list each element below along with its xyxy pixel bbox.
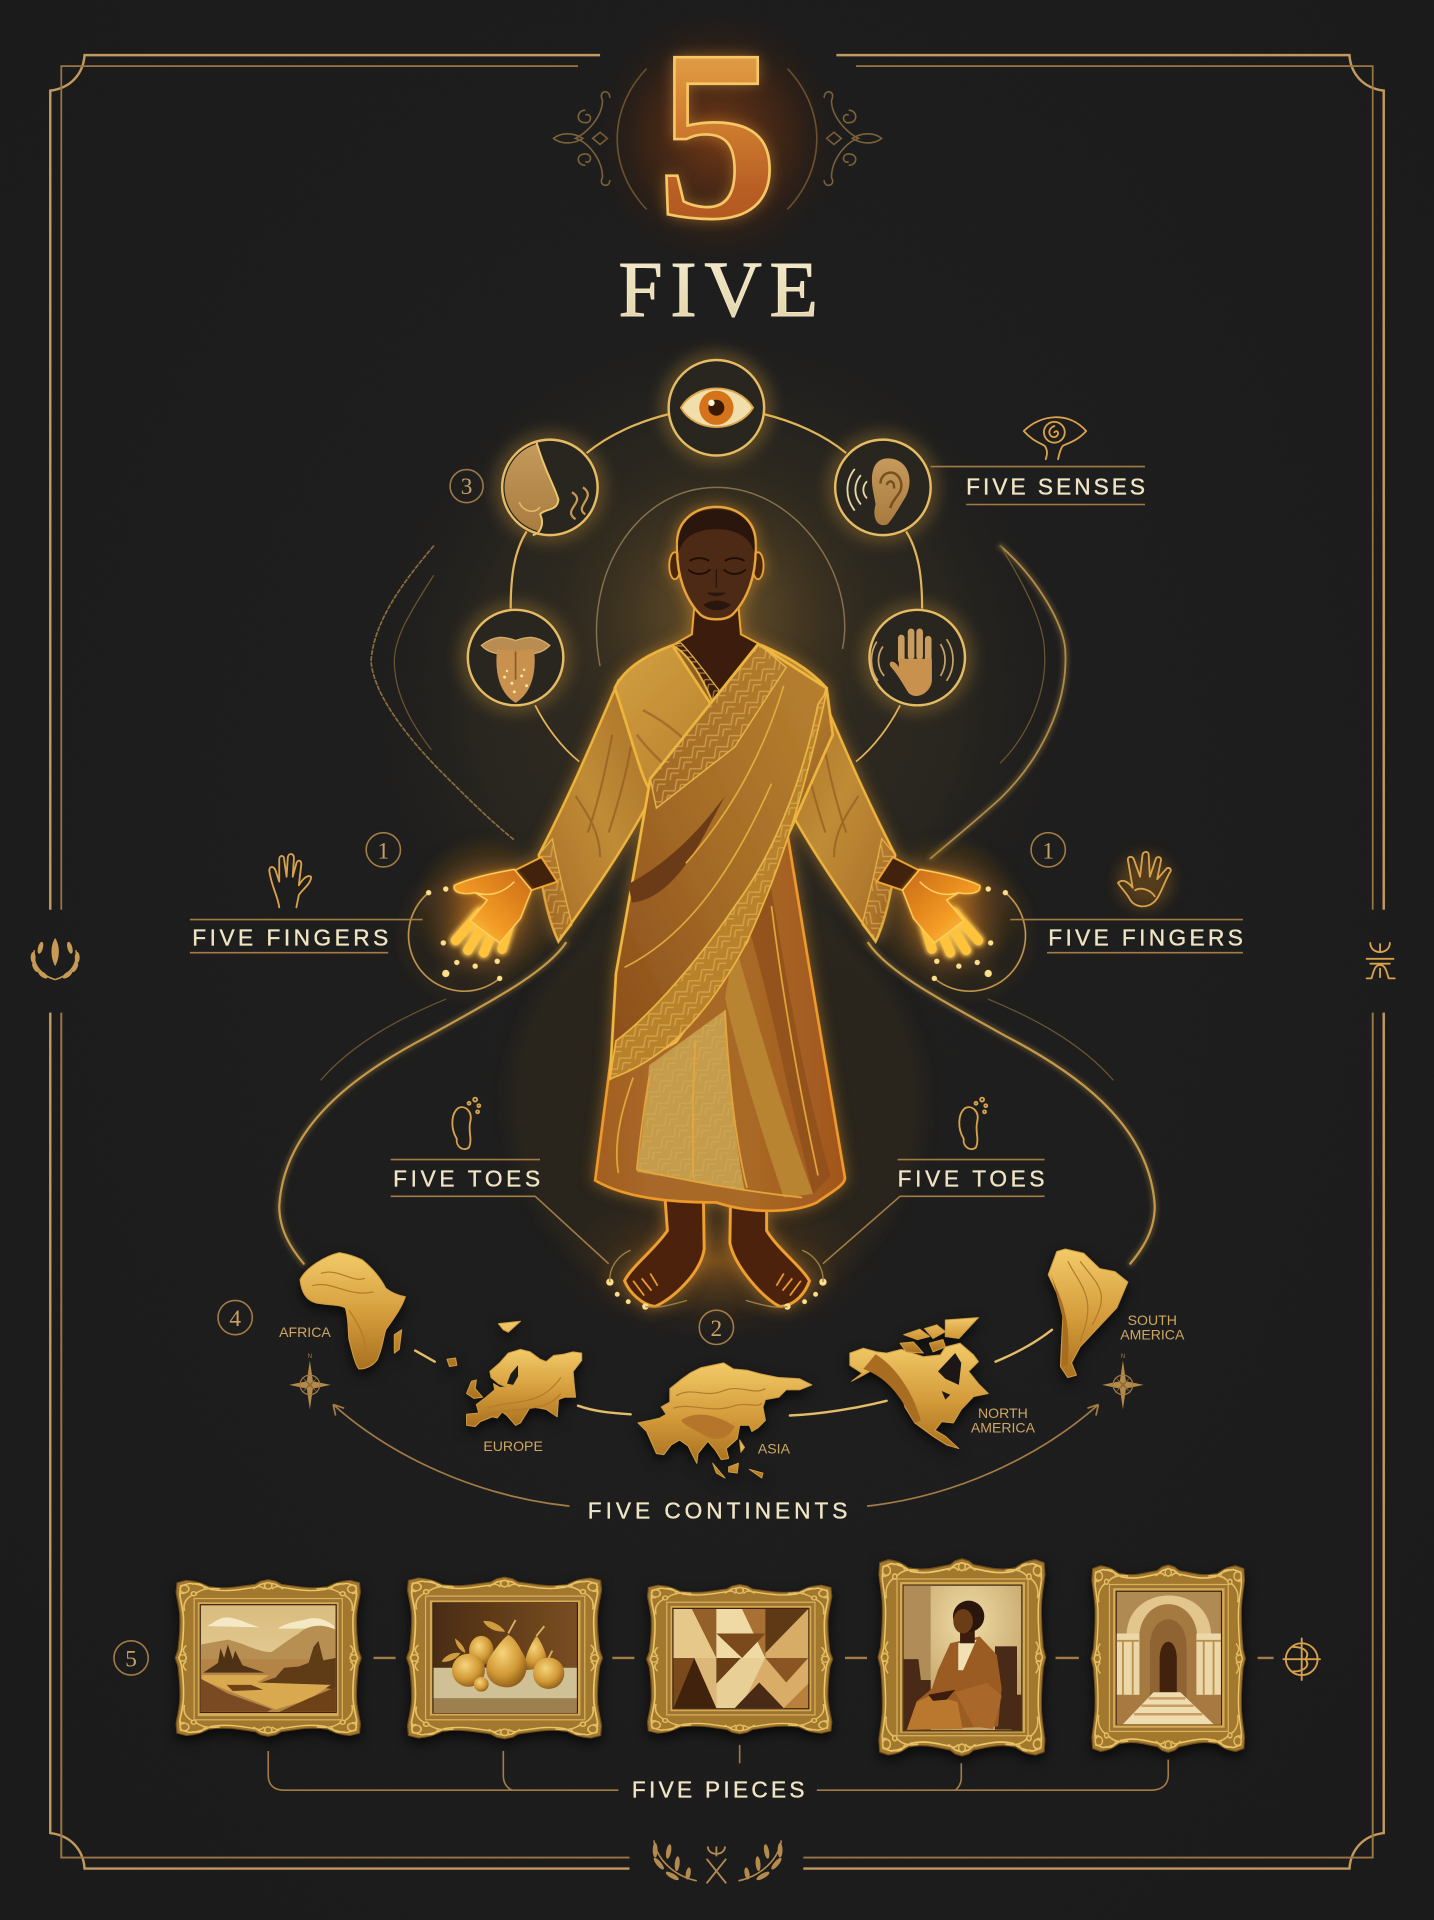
icon: ear sense (827, 431, 939, 544)
frame connectors (374, 1657, 1274, 1659)
label: five toes right: FIVE TOES (898, 1166, 1045, 1192)
title: FIVE (618, 246, 818, 334)
swirl lines (279, 546, 1155, 1264)
continent names: AMERICA (971, 1420, 1036, 1436)
icon: senses eye spiral (1024, 417, 1086, 459)
icon: touch sense (861, 601, 974, 714)
number 5 (595, 0, 840, 270)
continent: Asia (638, 1363, 812, 1478)
compass right (1102, 1353, 1144, 1409)
badge 1 left (366, 833, 400, 867)
lower robe (595, 827, 845, 1211)
compass right: N (1121, 1353, 1125, 1360)
icon: nose sense (490, 431, 606, 544)
continent: Europe (467, 1321, 582, 1427)
icon: eye sense (660, 351, 773, 464)
label: five senses: FIVE SENSES (966, 474, 1145, 500)
legs and feet (625, 1163, 809, 1307)
badge 1 left: 1 (378, 838, 389, 864)
background glow around figure (361, 318, 1071, 1341)
continent: North America (850, 1318, 988, 1449)
sash (610, 644, 827, 1079)
badge 2 (699, 1310, 734, 1344)
badge 4 (218, 1300, 252, 1335)
continent names (279, 1312, 1185, 1456)
continent: Africa (300, 1253, 457, 1369)
continent names: EUROPE (483, 1438, 543, 1454)
label: five fingers right (1010, 920, 1243, 953)
arm left (539, 681, 659, 942)
continent names: AFRICA (279, 1324, 331, 1340)
painting: still life pears (407, 1577, 603, 1739)
badge 3: 3 (461, 474, 472, 500)
icon: tongue sense (459, 601, 572, 714)
label: five toes right (823, 1160, 1045, 1264)
badge 2: 2 (711, 1316, 722, 1342)
label: five senses (931, 467, 1145, 504)
badge 3 (450, 470, 483, 503)
badge 1 right (1031, 833, 1065, 867)
arrows to five continents (333, 1404, 1098, 1506)
continents (300, 1249, 1128, 1478)
label: five fingers right: FIVE FINGERS (1048, 924, 1243, 950)
painting: geometric (647, 1584, 833, 1734)
sense ring connectors (511, 414, 922, 762)
number 5: 5 (657, 0, 779, 270)
badge 5: 5 (125, 1647, 137, 1673)
hand right glowing (871, 836, 1025, 991)
foot dots (606, 1250, 827, 1310)
continent: South America (1048, 1249, 1128, 1378)
icon: left laurel emblem (31, 938, 80, 980)
label: five toes left: FIVE TOES (393, 1166, 540, 1192)
top flourish ornament (554, 69, 882, 209)
label: five toes left (391, 1160, 609, 1264)
label: five continents: FIVE CONTINENTS (588, 1497, 847, 1523)
figure (409, 507, 1025, 1310)
badge 4: 4 (229, 1306, 241, 1332)
continent names: SOUTH (1128, 1312, 1177, 1328)
compass left: N (308, 1353, 312, 1360)
head (669, 507, 764, 619)
icon: hand outline left (269, 854, 311, 907)
label: five pieces: FIVE PIECES (632, 1777, 805, 1803)
continent names: AMERICA (1120, 1327, 1185, 1343)
number 5: 5 (657, 0, 779, 270)
continent names: ASIA (758, 1440, 791, 1456)
arm right (775, 681, 895, 942)
icon: foot right (959, 1098, 987, 1149)
label: five fingers left (190, 920, 423, 953)
continent arc segments (415, 1330, 1052, 1416)
painting: landscape (175, 1580, 361, 1736)
icon: foot left (452, 1098, 480, 1149)
painting: archway (1091, 1565, 1245, 1752)
icon: right glyph emblem (1367, 943, 1395, 978)
icon: right globe glyph (1283, 1638, 1320, 1680)
painting: portrait (878, 1559, 1046, 1756)
brackets to five pieces (268, 1745, 1168, 1790)
continent names: NORTH (978, 1405, 1028, 1421)
badge 5 (114, 1641, 148, 1675)
icon: hand outline right (1118, 852, 1172, 909)
compass left (289, 1353, 331, 1409)
hand left glowing (409, 836, 563, 991)
bottom ornament (652, 1840, 783, 1883)
label: five fingers left: FIVE FINGERS (192, 924, 388, 950)
neck and chest (672, 606, 762, 713)
badge 1 right: 1 (1042, 838, 1054, 864)
inner halo ring (597, 487, 845, 666)
torso (615, 645, 833, 857)
